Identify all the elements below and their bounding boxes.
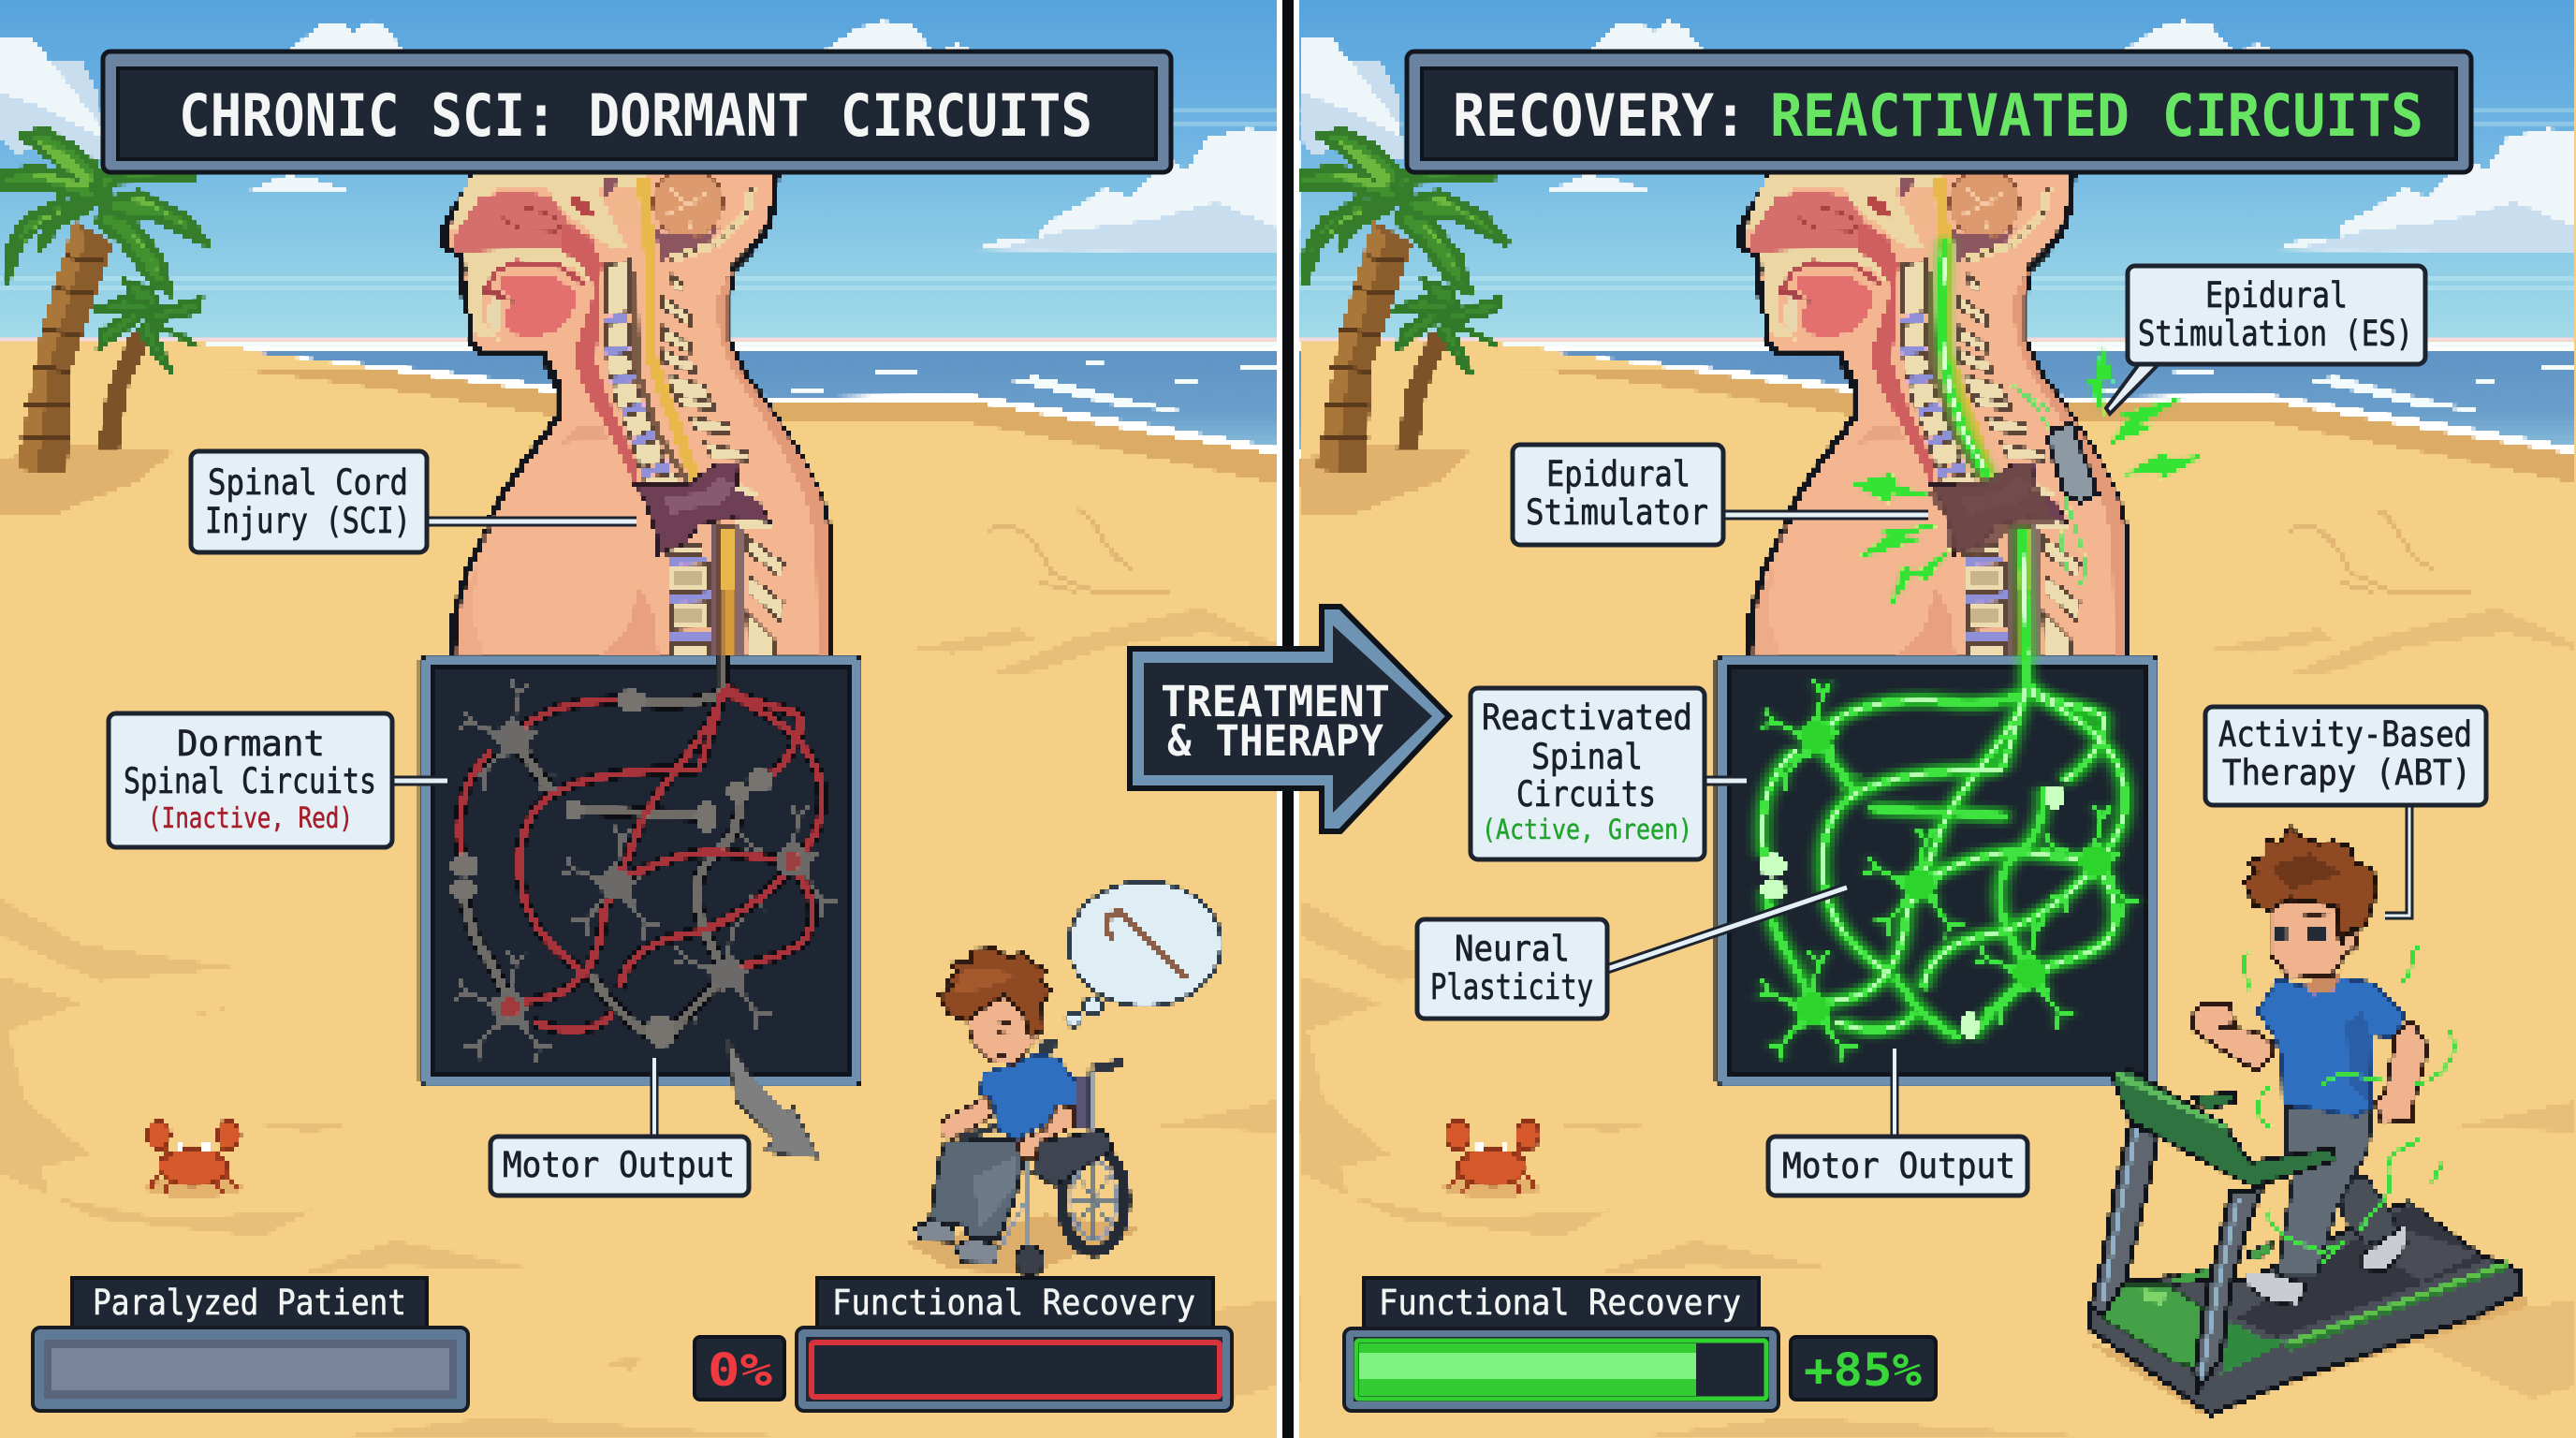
thought bubble	[1069, 882, 1222, 1006]
label: motor output left: Motor Output	[503, 1145, 735, 1185]
label: spinal cord injury: Injury (SCI)	[205, 501, 411, 541]
title: chronic SCI: CHRONIC SCI: DORMANT CIRCUITS	[179, 81, 1092, 150]
label: epidural stimulation: Epidural	[2205, 275, 2348, 315]
value: 0%: 0%	[708, 1344, 772, 1397]
label: activity-based therapy: Therapy (ABT)	[2222, 753, 2471, 793]
label: epidural stimulation: Stimulation (ES)	[2138, 314, 2413, 354]
label: reactivated spinal circuits: (Active, Green)	[1482, 814, 1692, 845]
label: motor output right	[1768, 1049, 2027, 1196]
label: neural plasticity: Plasticity	[1430, 967, 1593, 1007]
gray motor arrow	[727, 1040, 820, 1158]
figure: head and spine anatomy, left	[445, 162, 830, 657]
figure: patient on treadmill	[2086, 828, 2530, 1415]
panel divider	[1277, 0, 1299, 1438]
title: chronic SCI	[103, 51, 1171, 172]
label: epidural stimulation	[2106, 266, 2425, 414]
label: dormant spinal circuits: Spinal Circuits	[124, 761, 376, 801]
label: reactivated spinal circuits	[1471, 688, 1747, 859]
stimulator device	[2048, 424, 2098, 502]
title: recovery	[1407, 51, 2471, 172]
title: recovery: RECOVERY:	[1453, 81, 1747, 150]
label: epidural stimulator	[1513, 445, 1928, 545]
label: neural plasticity	[1417, 888, 1847, 1019]
arrow: treatment and therapy: & THERAPY	[1167, 716, 1383, 766]
neuron box: dormant circuits	[420, 654, 861, 1086]
status: paralyzed patient	[33, 1278, 468, 1411]
label: reactivated spinal circuits: Spinal	[1531, 737, 1643, 777]
label: reactivated spinal circuits: Circuits	[1516, 774, 1656, 814]
figure: head and spine anatomy, right	[1741, 162, 2127, 657]
arrow: treatment and therapy	[1130, 607, 1449, 831]
status: functional recovery +85%	[1344, 1278, 1778, 1411]
neuron box: reactivated circuits	[1717, 654, 2158, 1086]
label: dormant spinal circuits	[109, 713, 447, 847]
label: reactivated spinal circuits: Reactivated	[1482, 697, 1692, 738]
value: 0%	[695, 1337, 784, 1400]
panel: left beach background	[0, 0, 1314, 1438]
label: motor output left	[490, 1058, 749, 1196]
circuit boxes and arrows	[420, 239, 2576, 1158]
label: dormant spinal circuits: (Inactive, Red)	[148, 802, 353, 835]
label: spinal cord injury	[191, 451, 637, 552]
label: motor output right: Motor Output	[1782, 1146, 2015, 1186]
label: activity-based therapy: Activity-Based	[2218, 714, 2472, 755]
value: +85%: +85%	[1804, 1344, 1922, 1397]
label: epidural stimulator: Epidural	[1546, 454, 1690, 494]
title: recovery: REACTIVATED CIRCUITS	[1770, 81, 2423, 150]
status: functional recovery 0%: Functional Recovery	[832, 1283, 1195, 1323]
arrow: treatment and therapy: TREATMENT	[1161, 677, 1390, 726]
label: dormant spinal circuits: Dormant	[177, 724, 325, 764]
status: functional recovery +85%: Functional Recovery	[1379, 1283, 1741, 1323]
label: activity-based therapy	[2205, 707, 2486, 916]
label: spinal cord injury: Spinal Cord	[208, 462, 408, 503]
panel: right beach background	[1299, 0, 2576, 1438]
label: epidural stimulator: Stimulator	[1526, 492, 1708, 533]
label: neural plasticity: Neural	[1455, 929, 1570, 969]
spinal electrical activation	[1855, 239, 2200, 658]
value: +85%	[1791, 1337, 1936, 1400]
status: paralyzed patient: Paralyzed Patient	[93, 1283, 406, 1323]
figure: patient in wheelchair	[905, 882, 1222, 1276]
status: functional recovery 0%	[797, 1278, 1232, 1411]
